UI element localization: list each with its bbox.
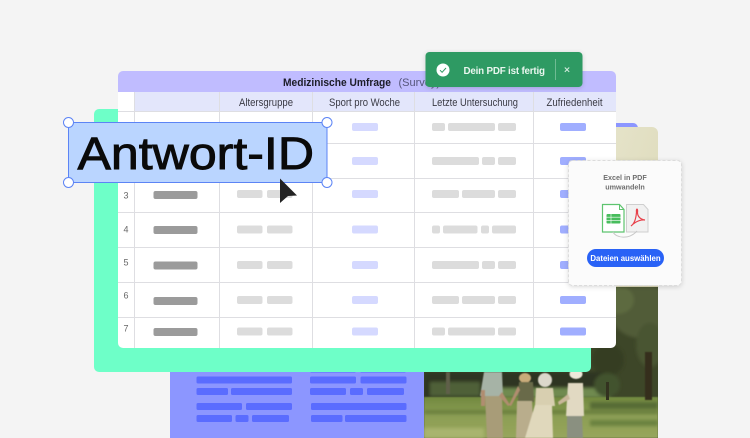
last examination bars	[432, 123, 516, 336]
column header row	[134, 92, 616, 111]
button: choose files: Dateien auswählen	[590, 254, 661, 263]
row numbers: 6	[124, 290, 129, 300]
row numbers: 4	[124, 224, 129, 234]
answer id bars	[154, 191, 198, 336]
icon: mouse cursor	[280, 178, 297, 203]
selected label: Antwort-ID	[64, 118, 332, 188]
column headers	[239, 97, 602, 109]
table title bar	[118, 71, 616, 92]
photo: seniors in a park	[424, 282, 670, 438]
selection handles	[64, 118, 332, 188]
column headers: Sport pro Woche	[329, 97, 400, 109]
icon: Excel document	[602, 204, 624, 232]
satisfaction bars	[560, 123, 586, 336]
card: Excel to PDF converter	[568, 160, 682, 286]
row numbers: 3	[124, 190, 129, 200]
panel: mint green backing sheet	[94, 109, 591, 372]
age group bars	[237, 190, 292, 336]
icon: conversion arrow	[613, 231, 637, 237]
column headers: Altersgruppe	[239, 97, 293, 109]
table title: Medizinische Umfrage	[283, 77, 391, 89]
card heading: Excel in PDF	[603, 173, 647, 182]
panel: blue tab behind table	[600, 123, 638, 134]
column headers: Letzte Untersuchung	[432, 97, 518, 109]
row numbers: 7	[124, 324, 129, 334]
table subtitle: (Survey)	[398, 77, 440, 89]
icon: PDF document	[626, 204, 648, 232]
panel: beige document top	[600, 127, 658, 293]
label text: Antwort-ID	[78, 128, 314, 179]
icon: close	[565, 68, 569, 72]
panel: survey table	[118, 71, 616, 348]
sport per week bars	[352, 123, 378, 336]
toast: PDF ready	[426, 52, 582, 87]
panel: blue document with text lines	[170, 360, 424, 438]
column headers: Zufriedenheit	[546, 97, 602, 109]
card heading second line: umwandeln	[605, 182, 645, 192]
table body	[118, 92, 616, 348]
icon: check circle	[436, 64, 450, 76]
toast message: Dein PDF ist fertig	[464, 66, 545, 77]
row numbers: 5	[124, 258, 129, 268]
row numbers	[124, 190, 129, 334]
